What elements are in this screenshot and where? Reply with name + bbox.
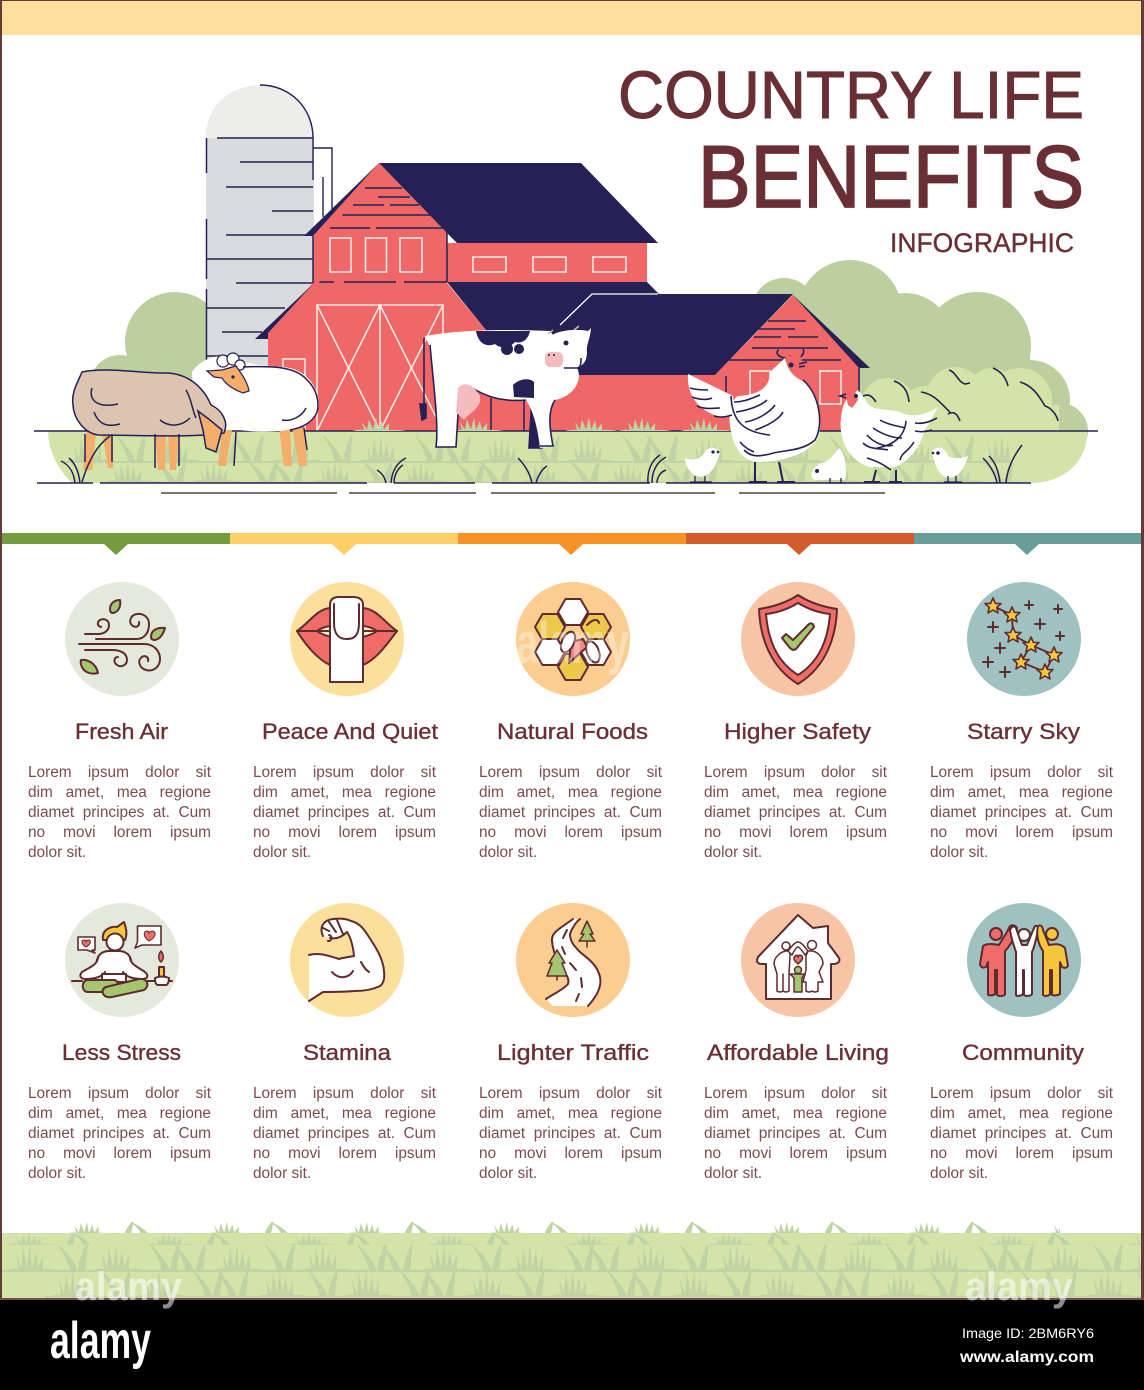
- body text: [479, 1085, 662, 1182]
- title line one: COUNTRY LIFE: [618, 58, 1084, 133]
- body text: Lorem ipsum dolor sit: [479, 764, 662, 781]
- icon: winding road and trees: [516, 903, 630, 1017]
- body text: diamet principes at. Cum: [28, 1125, 211, 1142]
- body text: [704, 1085, 887, 1182]
- body text: Lorem ipsum dolor sit: [253, 1085, 436, 1102]
- heading: Higher Safety: [724, 719, 871, 744]
- lower roof: [447, 282, 793, 375]
- body text: dolor sit.: [479, 1165, 537, 1182]
- upper gable and wing: [313, 163, 447, 283]
- body text: dim amet, mea regione: [704, 1105, 887, 1122]
- body text: Lorem ipsum dolor sit: [930, 764, 1113, 781]
- footer url: www.alamy.com: [959, 1349, 1094, 1366]
- body text: dim amet, mea regione: [479, 784, 662, 801]
- heading: Lighter Traffic: [497, 1040, 649, 1065]
- body text: [28, 1085, 211, 1182]
- horizon lines: [34, 430, 1098, 432]
- light bush: [860, 367, 1059, 434]
- illustration: farm scene: [34, 85, 1098, 493]
- body text: no movi lorem ipsum: [930, 1145, 1113, 1162]
- body text: dolor sit.: [704, 1165, 762, 1182]
- heading: Fresh Air: [75, 719, 168, 744]
- body text: diamet principes at. Cum: [28, 804, 211, 821]
- body text: [930, 764, 1113, 861]
- upper roof: [379, 163, 658, 243]
- body text: diamet principes at. Cum: [253, 804, 436, 821]
- heading: Community: [962, 1040, 1084, 1065]
- body text: dolor sit.: [704, 844, 762, 861]
- body text: Lorem ipsum dolor sit: [479, 1085, 662, 1102]
- body text: Lorem ipsum dolor sit: [704, 764, 887, 781]
- body text: no movi lorem ipsum: [704, 1145, 887, 1162]
- body text: [253, 1085, 436, 1182]
- panel: starry sky: [930, 582, 1113, 861]
- body text: no movi lorem ipsum: [28, 824, 211, 841]
- body text: dolor sit.: [28, 1165, 86, 1182]
- body text: Lorem ipsum dolor sit: [704, 1085, 887, 1102]
- watermark traces: alamy: [516, 611, 629, 676]
- body text: dim amet, mea regione: [28, 784, 211, 801]
- body text: diamet principes at. Cum: [704, 1125, 887, 1142]
- body text: dolor sit.: [479, 844, 537, 861]
- icon: meditating person: [65, 903, 179, 1017]
- icon: honeycomb and bee: [516, 582, 630, 696]
- body text: dolor sit.: [253, 1165, 311, 1182]
- heading: Stamina: [303, 1040, 392, 1065]
- icon: constellation: [967, 582, 1081, 696]
- cow head: [545, 328, 591, 368]
- udder: [456, 384, 480, 420]
- panel: less stress: [28, 903, 211, 1182]
- body text: dolor sit.: [253, 844, 311, 861]
- white sheep: [192, 353, 319, 466]
- body text: diamet principes at. Cum: [479, 804, 662, 821]
- body text: diamet principes at. Cum: [930, 804, 1113, 821]
- icon: family in house: [741, 903, 855, 1017]
- heading: Less Stress: [62, 1040, 181, 1065]
- chicks: [685, 448, 968, 483]
- brown sheep head: [198, 411, 222, 452]
- barn windows and door: [283, 238, 841, 431]
- bushes behind the farm: [90, 260, 1088, 459]
- body text: dolor sit.: [28, 844, 86, 861]
- body text: no movi lorem ipsum: [253, 824, 436, 841]
- body text: Lorem ipsum dolor sit: [28, 764, 211, 781]
- heading: Affordable Living: [707, 1040, 889, 1065]
- icon: finger on lips: [290, 582, 404, 696]
- panel: peace and quiet: [253, 582, 438, 861]
- rooster: [688, 349, 820, 482]
- body text: dim amet, mea regione: [930, 1105, 1113, 1122]
- silo: [206, 85, 332, 368]
- body text: diamet principes at. Cum: [704, 804, 887, 821]
- body text: no movi lorem ipsum: [479, 824, 662, 841]
- spots: [476, 331, 530, 347]
- ground: [48, 431, 1087, 483]
- panel: stamina: [253, 903, 436, 1182]
- icon: shield with check: [741, 582, 855, 696]
- icon: wind and leaves: [65, 582, 179, 696]
- body text: no movi lorem ipsum: [930, 824, 1113, 841]
- subtitle: INFOGRAPHIC: [890, 228, 1074, 258]
- barn lines: [313, 188, 859, 431]
- footer image id: Image ID: 2BM6RY6: [962, 1325, 1094, 1341]
- panel: community: [930, 903, 1113, 1182]
- body text: [253, 764, 436, 861]
- top yellow band: [0, 0, 1144, 35]
- body text: [28, 764, 211, 861]
- icon: three people: [967, 903, 1081, 1017]
- title line two: BENEFITS: [698, 127, 1084, 226]
- body text: dolor sit.: [930, 844, 988, 861]
- body text: dim amet, mea regione: [253, 784, 436, 801]
- heading: Natural Foods: [497, 719, 648, 744]
- foreground grass strokes: [61, 445, 1022, 483]
- body text: [704, 764, 887, 861]
- hen: [840, 390, 938, 482]
- body text: Lorem ipsum dolor sit: [253, 764, 436, 781]
- red barn: [255, 163, 870, 431]
- body text: dim amet, mea regione: [479, 1105, 662, 1122]
- grass texture: [60, 436, 1010, 463]
- body text: dolor sit.: [930, 1165, 988, 1182]
- panel: fresh air: [28, 582, 211, 861]
- panel: higher safety: [704, 582, 887, 861]
- body text: diamet principes at. Cum: [479, 1125, 662, 1142]
- watermark traces: alamy: [75, 1265, 183, 1309]
- heading: Starry Sky: [967, 719, 1080, 744]
- body text: diamet principes at. Cum: [930, 1125, 1113, 1142]
- icon: flexed arm: [290, 903, 404, 1017]
- brown sheep: [73, 370, 226, 482]
- body text: Lorem ipsum dolor sit: [930, 1085, 1113, 1102]
- lower barn wall: [268, 283, 860, 431]
- panel: lighter traffic: [479, 903, 662, 1182]
- body text: dim amet, mea regione: [253, 1105, 436, 1122]
- body text: no movi lorem ipsum: [479, 1145, 662, 1162]
- watermark traces: alamy: [965, 1265, 1074, 1309]
- bottom grass strip: [0, 1222, 1144, 1300]
- body text: [930, 1085, 1113, 1182]
- white sheep head: [207, 366, 249, 393]
- body text: no movi lorem ipsum: [704, 824, 887, 841]
- body text: Lorem ipsum dolor sit: [28, 1085, 211, 1102]
- colour bar with pointers: [2, 533, 1141, 555]
- footer logo: alamy: [50, 1312, 151, 1370]
- body text: no movi lorem ipsum: [28, 1145, 211, 1162]
- panel: affordable living: [704, 903, 889, 1182]
- grass on horizon: [352, 418, 734, 431]
- body text: dim amet, mea regione: [28, 1105, 211, 1122]
- body text: dim amet, mea regione: [704, 784, 887, 801]
- heading: Peace And Quiet: [262, 719, 438, 744]
- cow: [420, 326, 591, 448]
- black footer: [0, 1300, 1144, 1390]
- body text: no movi lorem ipsum: [253, 1145, 436, 1162]
- panel: natural foods: [479, 582, 662, 861]
- body text: diamet principes at. Cum: [253, 1125, 436, 1142]
- body text: [479, 764, 662, 861]
- body text: dim amet, mea regione: [930, 784, 1113, 801]
